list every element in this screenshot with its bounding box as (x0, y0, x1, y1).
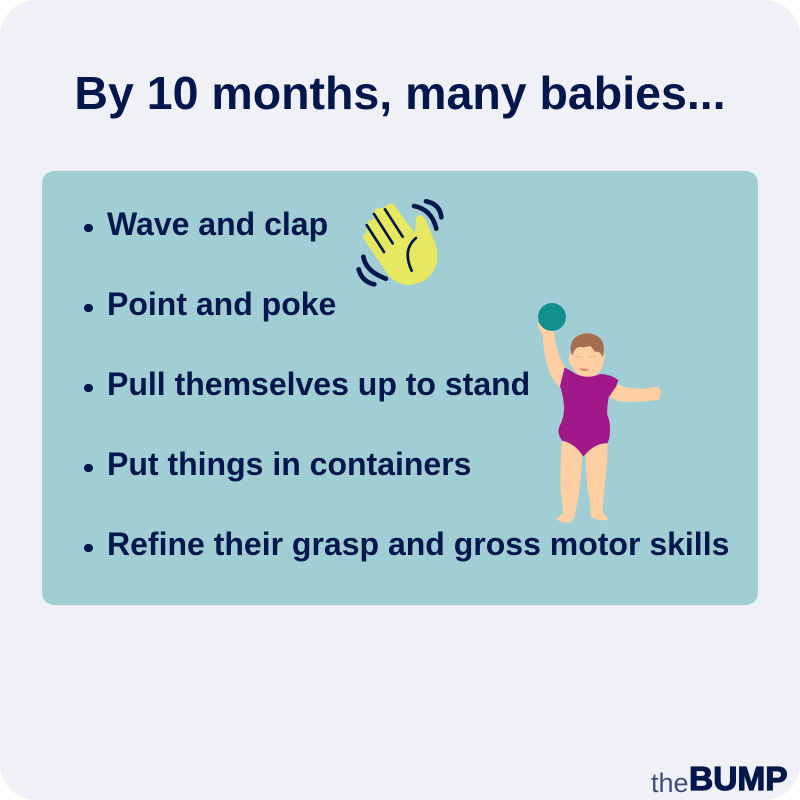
icon: waving hand (359, 201, 441, 285)
baby outstretched arm (609, 384, 661, 402)
logo: the Bump (651, 761, 788, 798)
logo word: the: the (651, 768, 689, 798)
baby mouth and eyes (579, 368, 589, 371)
bullet 2 (84, 304, 92, 312)
list item: wave and clap: Wave and clap (107, 206, 328, 242)
bullet 5 (84, 544, 92, 552)
list item: pull up: Pull themselves up to stand (107, 366, 530, 402)
baby raised arm (537, 323, 568, 387)
bullet 1 (84, 224, 92, 232)
baby head (569, 342, 605, 378)
baby onesie (558, 367, 618, 457)
bullet 3 (84, 384, 92, 392)
title: By 10 months, many babies... (74, 66, 726, 118)
baby hair (571, 333, 604, 357)
panel: milestones (42, 171, 758, 605)
bullet list (84, 206, 729, 562)
illustration: baby with ball (537, 303, 661, 523)
list item: point and poke: Point and poke (107, 286, 336, 322)
ball (538, 303, 566, 331)
list item: containers: Put things in containers (107, 446, 471, 482)
baby legs and feet (556, 442, 608, 523)
logo word: BUMP: BUMP (689, 761, 788, 798)
bullet 4 (84, 464, 92, 472)
list item: grasp: Refine their grasp and gross motor skills (107, 526, 729, 562)
